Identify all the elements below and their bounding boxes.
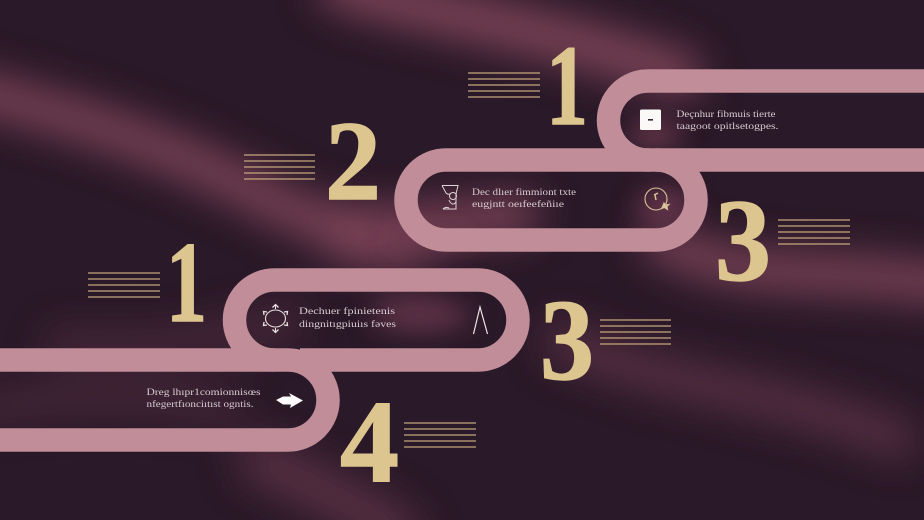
icon: abstract face — [442, 186, 458, 209]
icon: white square with dash — [640, 110, 661, 130]
text block: third loop — [299, 306, 396, 330]
text block: bottom loop: Dreg lhıpr1comionnisœs — [146, 388, 261, 398]
bottom loop track — [0, 360, 328, 440]
text block: third loop: dingnitıgpiuiıs fəves — [299, 319, 396, 330]
top loop track — [608, 81, 924, 160]
lines beside lower 3 — [600, 320, 671, 344]
third loop track — [234, 280, 518, 360]
text block: second loop: eugjntt oeıfeefeñiıe — [472, 199, 564, 210]
lines beside lower 1 — [88, 273, 160, 297]
icon: circular arrows — [264, 304, 288, 332]
icon: clock with star — [645, 188, 669, 210]
number 4: 4 — [340, 376, 399, 507]
number 3 lower: 3 — [540, 277, 594, 405]
lines beside right 3 — [778, 220, 850, 244]
text block: bottom loop: nfegertfıonciıtıst ogntis. — [146, 399, 254, 410]
text block: top loop: Deçnhur fibmuis tierte — [676, 109, 776, 120]
number 1 lower: 1 — [166, 219, 207, 346]
lines beside upper 1 — [468, 73, 540, 97]
number 1 upper: 1 — [546, 22, 588, 149]
text block: top loop — [676, 109, 778, 132]
text block: second loop: Dec dlıer fimmiont txte — [472, 187, 576, 198]
lines beside 2 — [244, 155, 315, 179]
number 3 right: 3 — [715, 175, 771, 306]
number 2: 2 — [325, 99, 381, 224]
text block: bottom loop — [146, 388, 261, 410]
text block: top loop: taagoot opitlsetogpes. — [676, 122, 778, 132]
text block: third loop: Dechuer fpinietenis — [299, 306, 395, 317]
text block: second loop — [472, 187, 576, 210]
second loop track — [406, 160, 696, 240]
icon: peak chevron — [474, 307, 488, 334]
lines beside 4 — [404, 423, 476, 447]
icon: white arrow — [276, 393, 303, 408]
